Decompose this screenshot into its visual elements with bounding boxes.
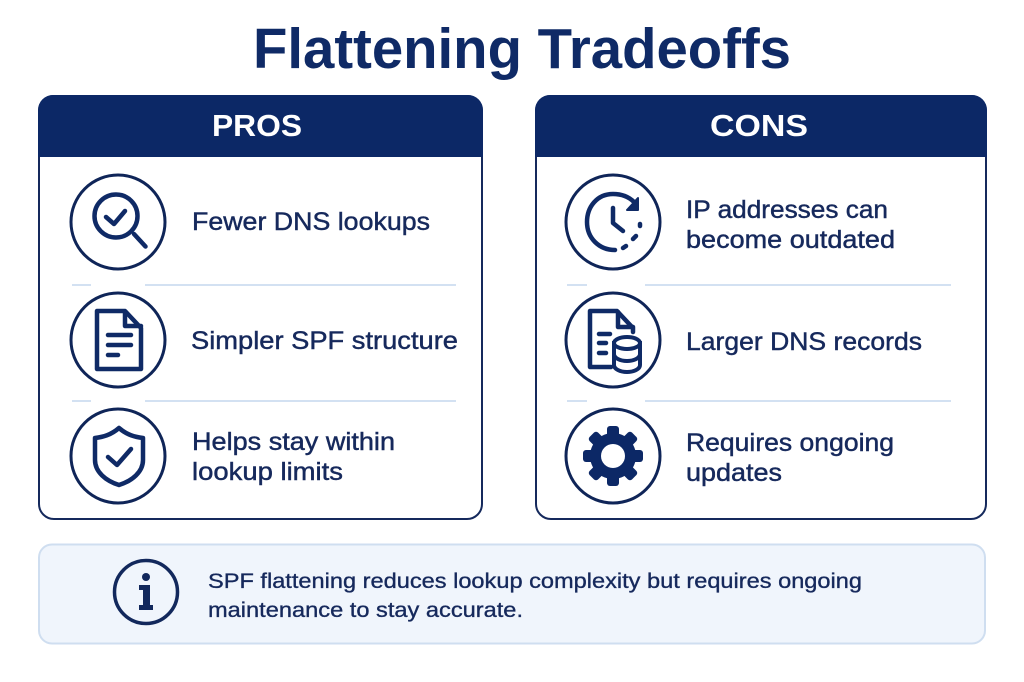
text: requires ongoing updates: updates — [686, 459, 782, 487]
panel: pros — [38, 95, 483, 519]
text: larger dns records: Larger DNS records — [686, 328, 922, 356]
text: requires ongoing updates: Requires ongoing — [686, 429, 894, 457]
callout text — [208, 569, 862, 622]
pros header — [38, 95, 483, 157]
text: helps stay within lookup limits: lookup limits — [192, 458, 343, 486]
panel: cons — [535, 95, 987, 519]
title: Flattening Tradeoffs — [253, 17, 791, 81]
text: fewer dns lookups: Fewer DNS lookups — [192, 208, 430, 236]
text: ip addresses can become outdated: IP addresses can — [686, 196, 888, 224]
pros heading: PROS — [212, 108, 302, 143]
cons heading: CONS — [710, 108, 808, 143]
icon: clock with arrow — [566, 175, 660, 269]
text: ip addresses can become outdated: become outdated — [686, 226, 895, 254]
text: ip addresses can become outdated — [686, 196, 895, 254]
icon: document with database — [566, 293, 660, 387]
text: helps stay within lookup limits: Helps stay within — [192, 428, 395, 456]
text: requires ongoing updates — [686, 429, 894, 487]
text: helps stay within lookup limits — [192, 428, 395, 486]
icon: magnifier with check — [71, 175, 165, 269]
cons header — [535, 95, 987, 157]
icon: shield with check — [71, 409, 165, 503]
text: simpler spf structure: Simpler SPF structure — [191, 327, 458, 355]
callout text: SPF flattening reduces lookup complexity but requires ongoing — [208, 569, 862, 593]
icon: gear — [566, 409, 660, 503]
callout text: maintenance to stay accurate. — [208, 598, 523, 622]
callout: summary note — [39, 544, 985, 644]
icon: document — [71, 293, 165, 387]
icon: info — [114, 560, 178, 624]
